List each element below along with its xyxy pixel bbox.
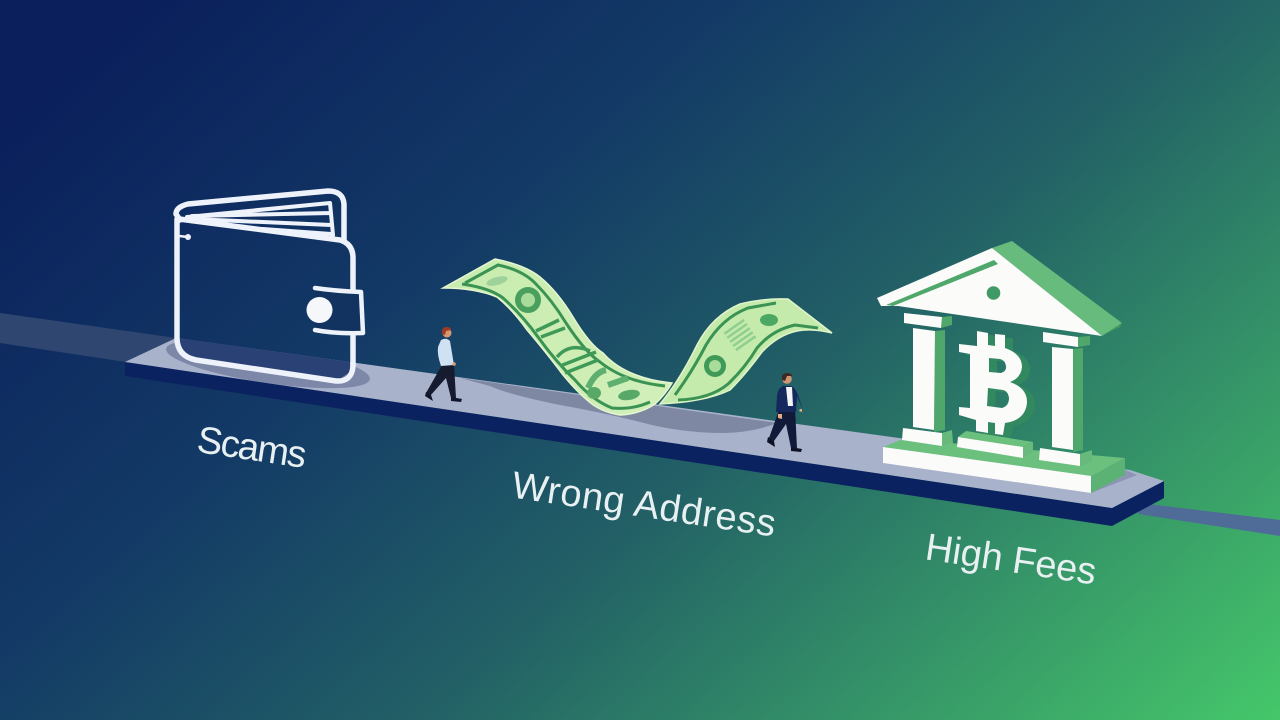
road segment left <box>0 313 176 362</box>
wallet inside over platform <box>178 338 350 380</box>
shoes <box>767 437 802 452</box>
label: High Fees: High Fees <box>923 527 1099 593</box>
bitcoin symbol shadow <box>967 334 1035 438</box>
shirt <box>438 339 454 366</box>
bill lower marks <box>588 370 628 388</box>
right column shaft <box>1052 347 1073 450</box>
wallet stitch dot <box>179 236 188 237</box>
right column side <box>1073 348 1083 452</box>
roof stripe <box>886 260 998 306</box>
hair <box>782 373 792 381</box>
bill top mark <box>485 274 509 288</box>
bank base front <box>883 447 1091 493</box>
right column base <box>1039 448 1080 466</box>
wallet pages <box>187 203 333 235</box>
bill left sheet <box>443 259 672 415</box>
shadow: bill <box>460 378 777 433</box>
bill left border <box>462 265 665 408</box>
hair <box>442 327 451 335</box>
bank platform shadow <box>883 450 1137 493</box>
icon: bitcoin bank <box>877 241 1137 493</box>
left column base side <box>942 430 953 446</box>
wallet body <box>177 219 353 381</box>
banknote <box>443 259 832 415</box>
head <box>442 328 452 338</box>
label: Scams: Scams <box>194 419 309 477</box>
roof edge <box>1102 323 1122 336</box>
shoes <box>425 392 462 402</box>
platform side <box>125 362 1164 526</box>
shirt <box>786 387 793 406</box>
legs <box>769 408 797 448</box>
hand <box>452 362 456 366</box>
icon: wallet <box>176 191 363 381</box>
road segment right <box>1138 503 1280 536</box>
bank base side <box>1091 458 1125 493</box>
wallet clasp <box>315 288 363 333</box>
bill right small seal <box>760 314 778 326</box>
bitcoin symbol <box>959 331 1027 435</box>
wallet cover <box>176 191 344 240</box>
bill lower seals <box>587 387 601 399</box>
legs <box>426 364 456 398</box>
roof circle <box>987 286 1000 300</box>
right column capital side <box>1078 336 1090 347</box>
bill right border <box>675 303 818 400</box>
roof front <box>877 248 1102 336</box>
roof back slope <box>992 241 1122 336</box>
middle step side <box>1023 442 1033 458</box>
bank base top <box>883 439 1125 476</box>
label: Wrong Address: Wrong Address <box>509 465 778 545</box>
hands <box>778 409 802 419</box>
left column side <box>934 330 945 432</box>
bill right seal <box>704 355 726 377</box>
left column base <box>902 428 942 446</box>
left column shaft <box>913 328 935 430</box>
left column capital <box>904 313 942 328</box>
bill right sheet <box>660 299 832 404</box>
head <box>782 374 792 384</box>
bill left seal <box>515 287 541 313</box>
platform top <box>125 338 1164 508</box>
bill portrait marks <box>536 320 598 373</box>
jacket <box>776 386 803 412</box>
road: walkway beam <box>0 313 1280 536</box>
wallet button <box>306 297 332 323</box>
middle step front <box>957 437 1023 458</box>
bill right emblem <box>724 320 756 350</box>
right column base side <box>1080 450 1092 466</box>
person: walker in shirt <box>425 327 462 402</box>
right column capital <box>1043 332 1078 347</box>
left column capital side <box>941 316 952 328</box>
middle step top <box>958 431 1033 447</box>
shadow: wallet <box>166 343 370 388</box>
person: walker in suit <box>767 373 803 452</box>
